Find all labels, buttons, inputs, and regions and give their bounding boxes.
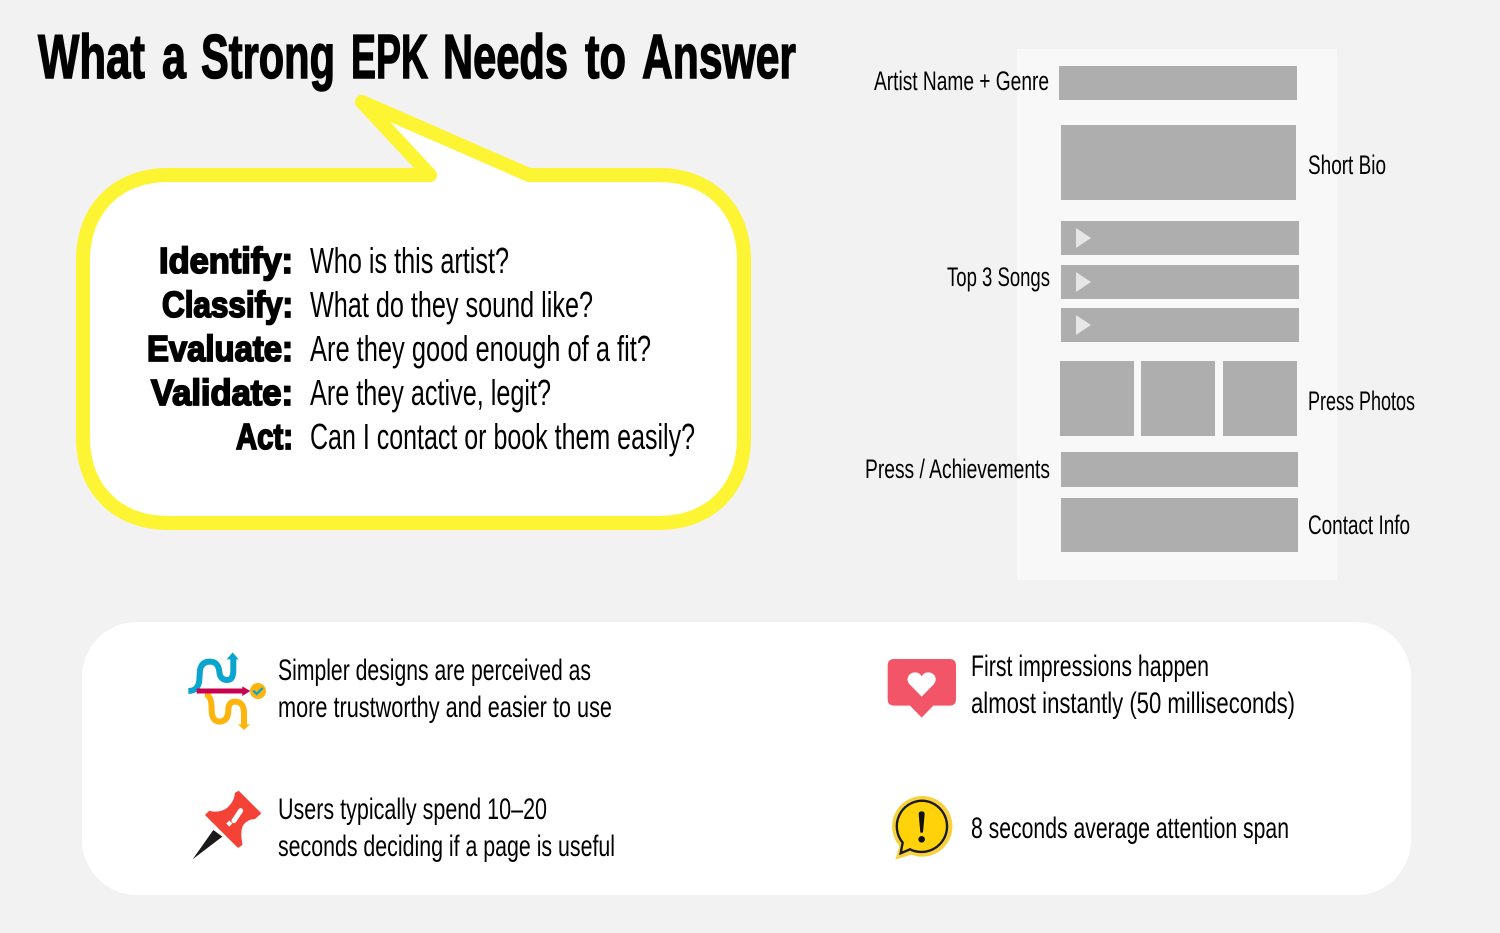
panel: speech bubble with questions: [83, 102, 744, 523]
question list: Are they active, legit?: [310, 372, 551, 413]
label: contact info: Contact Info: [1308, 510, 1410, 540]
panel: statistics: [82, 622, 1411, 895]
question list: Can I contact or book them easily?: [310, 416, 695, 457]
question list: [147, 240, 695, 457]
question list: Evaluate:: [147, 328, 293, 369]
title: a: [162, 23, 186, 92]
title: What: [38, 23, 145, 92]
title: Needs: [443, 23, 568, 92]
block: press photos: [1060, 361, 1297, 436]
title: to: [585, 23, 626, 92]
label: short bio: Short Bio: [1308, 150, 1386, 180]
block: artist name and genre: [1059, 66, 1297, 100]
text: users decide: Users typically spend 10–20: [278, 793, 547, 826]
text: attention span: 8 seconds average attention span: [971, 812, 1289, 845]
text: users decide: [278, 793, 615, 863]
question list: Classify:: [162, 284, 293, 325]
block: press and achievements: [1061, 452, 1298, 487]
block: short bio: [1061, 125, 1296, 200]
icon: red push pin: [193, 791, 261, 859]
question list: Validate:: [151, 372, 293, 413]
question list: What do they sound like?: [310, 284, 593, 325]
label: artist name + genre: Artist Name + Genre: [874, 66, 1049, 96]
text: simpler designs: Simpler designs are perceived as: [278, 654, 591, 687]
icon: exclamation speech bubble: [892, 796, 952, 860]
speech bubble shape: [83, 102, 744, 523]
question list: Are they good enough of a fit?: [310, 328, 651, 369]
title: [38, 23, 796, 92]
block: contact info: [1061, 498, 1298, 552]
question list: Identify:: [159, 240, 293, 281]
title: Answer: [642, 23, 796, 92]
block: top 3 songs: [1061, 221, 1299, 342]
text: users decide: seconds deciding if a page is useful: [278, 830, 615, 863]
icon: heart notification bubble: [888, 659, 956, 718]
text: first impressions: almost instantly (50 milliseconds): [971, 687, 1295, 720]
label: press / achievements: Press / Achievements: [865, 454, 1050, 484]
panel: EPK wireframe: [1017, 49, 1337, 580]
title: EPK: [351, 23, 428, 92]
icon: winding paths to a checkmark: [188, 652, 266, 730]
question list: Act:: [236, 416, 293, 457]
label: press photos: Press Photos: [1308, 386, 1415, 416]
text: first impressions: First impressions happen: [971, 650, 1209, 683]
question list: Who is this artist?: [310, 240, 509, 281]
label: top 3 songs: Top 3 Songs: [947, 262, 1050, 292]
text: simpler designs: more trustworthy and easier to use: [278, 691, 612, 724]
text: first impressions: [971, 650, 1295, 720]
title: Strong: [201, 23, 335, 92]
text: simpler designs: [278, 654, 612, 724]
